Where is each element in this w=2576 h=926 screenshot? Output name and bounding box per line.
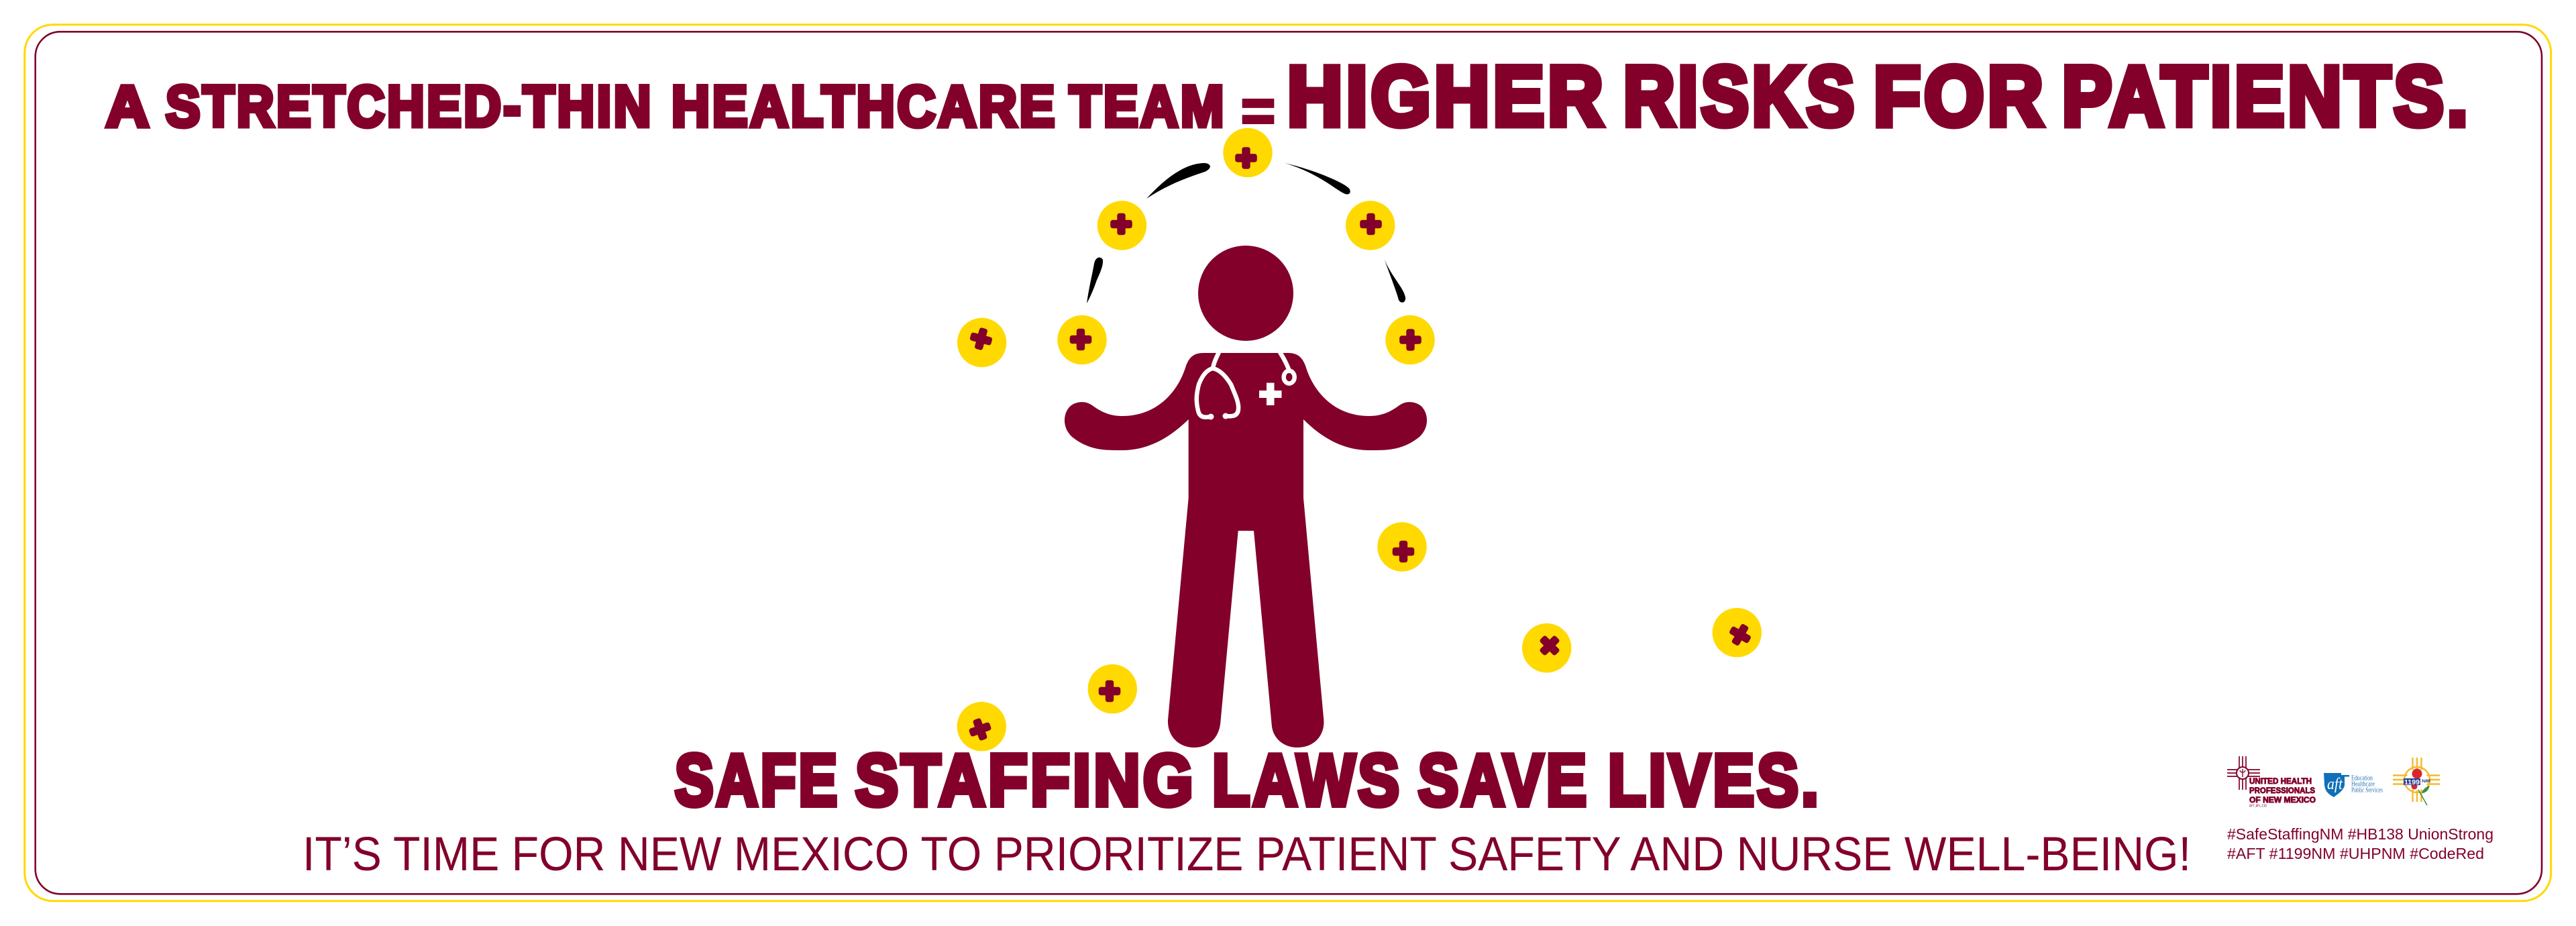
title: stretched-thin healthcare team = higher risks for patients: HIGHER [1287,50,1607,144]
ball: dropped far right [1713,608,1762,657]
logo: United Health Professionals of New Mexico: PROFESSIONALS [2249,786,2315,795]
slogan: safe staffing laws save lives: SAFE [675,739,840,821]
slogan: safe staffing laws save lives: LAWS [1212,739,1402,821]
ball: dropped left of legs [1088,664,1137,713]
logo: AFT shield: Public Services [2351,787,2383,794]
ball: upper right [1346,201,1395,250]
ball: lower left [1057,315,1107,364]
ball: dropped centre right [1522,623,1571,672]
juggling motion swoosh: upper right [1285,163,1350,195]
logo: 1199NM [2393,758,2440,805]
body [1065,353,1427,748]
title: stretched-thin healthcare team = higher risks for patients: STRETCHED-THIN [166,74,653,139]
hashtags [2227,825,2493,862]
title: stretched-thin healthcare team = higher risks for patients [106,50,2471,145]
slogan: safe staffing laws save lives: SAVE [1418,739,1589,821]
ball: dropped bottom left [957,702,1006,751]
logo: AFT shield: Education [2351,774,2373,782]
logo: AFT shield: Healthcare [2351,781,2375,788]
title: stretched-thin healthcare team = higher risks for patients: PATIENTS. [2062,50,2471,144]
ball: top [1223,128,1273,177]
juggling motion swoosh: left [1087,258,1103,303]
title: stretched-thin healthcare team = higher risks for patients: = [1241,78,1275,145]
logo: AFT shield [2324,773,2383,797]
logo: 1199NM: NM [2422,780,2430,784]
ball: upper left [1097,201,1146,250]
slogan: safe staffing laws save lives [675,739,1821,821]
call to action line: IT’S TIME FOR NEW MEXICO TO PRIORITIZE PATIENT SAFETY AND NURSE WELL-BEING! [303,828,2191,881]
title: stretched-thin healthcare team = higher risks for patients: HEALTHCARE [672,74,1057,139]
logo: 1199NM: 1199 [2404,779,2420,786]
slogan: safe staffing laws save lives: STAFFING [855,739,1196,821]
hashtags: #AFT #1199NM #UHPNM #CodeRed [2227,845,2484,862]
healthcare worker figure [1065,246,1427,748]
title: stretched-thin healthcare team = higher risks for patients: RISKS [1623,50,1858,144]
white cross on scrubs [1259,382,1281,405]
stethoscope [1197,353,1295,417]
ball: lower right [1385,315,1435,364]
title: stretched-thin healthcare team = higher risks for patients: A [106,74,152,139]
juggling motion swoosh: right [1385,259,1405,303]
logo: AFT shield: aft [2327,776,2343,793]
ball: falling right of figure [1377,522,1427,572]
title: stretched-thin healthcare team = higher risks for patients: TEAM [1069,74,1226,139]
juggling motion swoosh: upper left [1146,163,1210,199]
logo: United Health Professionals of New Mexico [2227,756,2316,808]
logo: United Health Professionals of New Mexico: UNITED HEALTH [2249,776,2312,786]
ball: far left [957,318,1006,367]
hashtags: #SafeStaffingNM #HB138 UnionStrong [2227,825,2493,843]
slogan: safe staffing laws save lives: LIVES. [1608,739,1821,821]
logo: United Health Professionals of New Mexico: OF NEW MEXICO [2249,795,2316,805]
title: stretched-thin healthcare team = higher risks for patients: FOR [1874,50,2047,144]
head [1198,246,1293,341]
logo: United Health Professionals of New Mexico: AFT, AFL-CIO [2249,804,2267,808]
